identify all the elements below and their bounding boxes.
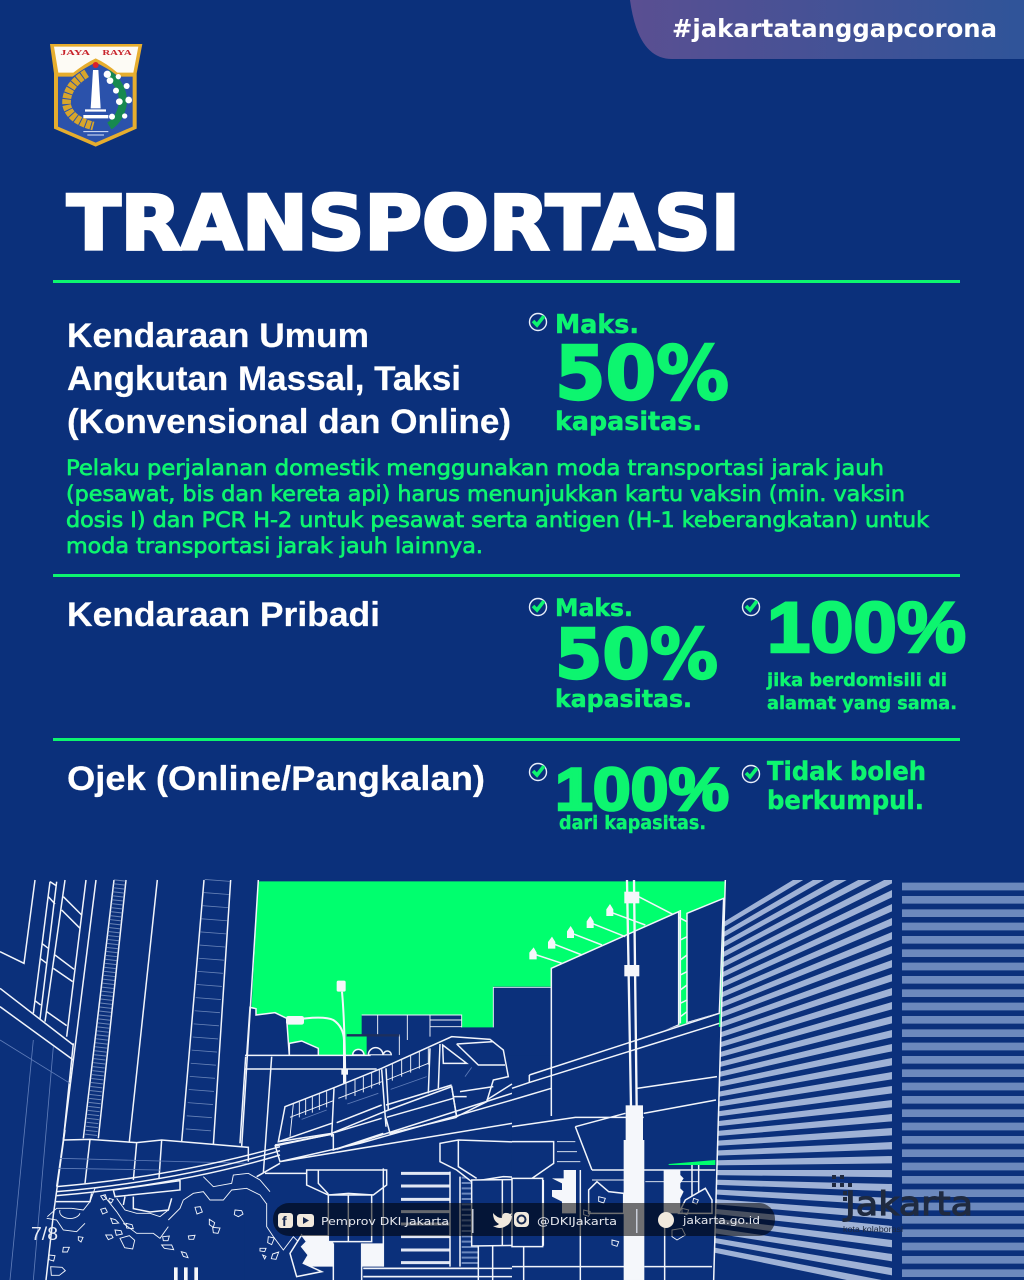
no gathering note: Tidak boleh (767, 757, 926, 787)
capacity 50 percent: Maks. (555, 594, 633, 622)
twitter and instagram account: @DKIJakarta (537, 1215, 617, 1228)
white glimpses behind pillars (302, 1235, 383, 1267)
capacity 50 percent: 50% (555, 615, 718, 695)
icon: check (742, 766, 760, 782)
signal mast (624, 880, 644, 1280)
capacity 100 percent: jika berdomisili di (766, 670, 947, 691)
capacity 100 percent: dari kapasitas. (559, 812, 706, 834)
no gathering note: berkumpul. (767, 786, 924, 816)
divider line 1 (53, 280, 960, 283)
page number: 7/8 (31, 1224, 58, 1244)
separator (636, 1209, 638, 1233)
capacity 100 percent (766, 589, 966, 714)
icon: Jakarta coat of arms: RAYA (102, 48, 132, 57)
paragraph: long distance travel rules: dosis I) dan PCR H-2 untuk pesawat serta antigen (H-1 keberangkatan) untuk (66, 508, 930, 532)
capacity 50 percent (555, 310, 729, 437)
podium and rail curve (46, 1130, 280, 1280)
capacity 50 percent: Maks. (555, 310, 639, 340)
website: jakarta.go.id (682, 1214, 760, 1227)
road deck lines (512, 1013, 719, 1280)
heading: private vehicles: Kendaraan Pribadi (67, 596, 380, 634)
divider line 3 (53, 738, 960, 741)
separator (472, 1209, 474, 1233)
striped facade (712, 880, 1024, 1280)
right part of illustration (511, 880, 1024, 1280)
street lamp (286, 981, 348, 1083)
panel: public transport (66, 310, 930, 558)
heading: public transport (67, 317, 511, 441)
logo wordmark: Jakarta (843, 1184, 973, 1223)
elevated train (275, 1037, 508, 1150)
hashtag pill (630, 0, 1024, 59)
stadium floodlights (529, 904, 645, 963)
tree silhouette over white (290, 1235, 322, 1277)
heading: public transport: Angkutan Massal, Taksi (67, 360, 461, 398)
paragraph: long distance travel rules: (pesawat, bis dan kereta api) harus menunjukkan kartu vaksin (min. vaksin (66, 482, 905, 506)
horizontal stripes (780, 883, 1024, 1280)
mid-rise facades (551, 912, 679, 1080)
divider line 2 (53, 574, 960, 577)
panel: motorcycle taxis (67, 756, 926, 834)
paragraph: long distance travel rules (66, 456, 930, 558)
heading: public transport: Kendaraan Umum (67, 317, 369, 355)
capacity 100 percent: alamat yang sama. (767, 693, 957, 714)
hashtag pill: #jakartatanggapcorona (672, 14, 997, 43)
capacity 100 percent: 100% (555, 756, 729, 823)
paragraph: long distance travel rules: Pelaku perjalanan domestik menggunakan moda transportasi jarak jauh (66, 456, 884, 480)
capacity 50 percent: 50% (555, 331, 729, 417)
sky (248, 881, 725, 1067)
traffic lights (552, 1170, 684, 1280)
icon: facebook: f (282, 1213, 287, 1229)
heading: public transport: (Konvensional dan Online) (67, 403, 511, 441)
tree outlines (47, 1173, 300, 1280)
icon: check (530, 598, 546, 616)
capacity 50 percent: kapasitas. (555, 407, 702, 437)
icon: youtube (297, 1214, 314, 1227)
capacity 50 percent: kapasitas. (555, 685, 692, 713)
footer social bar (273, 1203, 775, 1236)
icon: facebook (278, 1213, 293, 1229)
capacity 100 percent: 100% (767, 589, 966, 668)
heading: motorcycle taxis: Ojek (Online/Pangkalan) (67, 760, 485, 798)
capacity 50 percent (555, 594, 718, 713)
green gap with ladder (639, 897, 687, 1023)
icon: globe (658, 1212, 674, 1228)
panel: private vehicles (67, 589, 966, 714)
no gathering note (767, 757, 926, 816)
icon: Jakarta coat of arms (50, 44, 142, 147)
viaduct deck (257, 1084, 575, 1280)
facebook account: Pemprov DKI Jakarta (321, 1215, 449, 1228)
Jakarta city logo (832, 1175, 973, 1234)
icon: Jakarta coat of arms: JAYA (60, 48, 91, 57)
icon: check (530, 764, 546, 780)
icon: twitter (493, 1213, 512, 1228)
illustration: city skyline with elevated train (0, 820, 963, 1280)
title: TRANSPORTASI (67, 179, 740, 267)
icon: instagram (514, 1212, 529, 1227)
logo tagline: kota kolaborasi (843, 1225, 903, 1234)
paragraph: long distance travel rules: moda transportasi jarak jauh lainnya. (66, 534, 483, 558)
icon: check (530, 314, 546, 330)
background buildings (240, 987, 718, 1280)
icon: check (742, 598, 760, 616)
logo dots (832, 1175, 852, 1201)
left tower blocks (0, 880, 258, 1280)
